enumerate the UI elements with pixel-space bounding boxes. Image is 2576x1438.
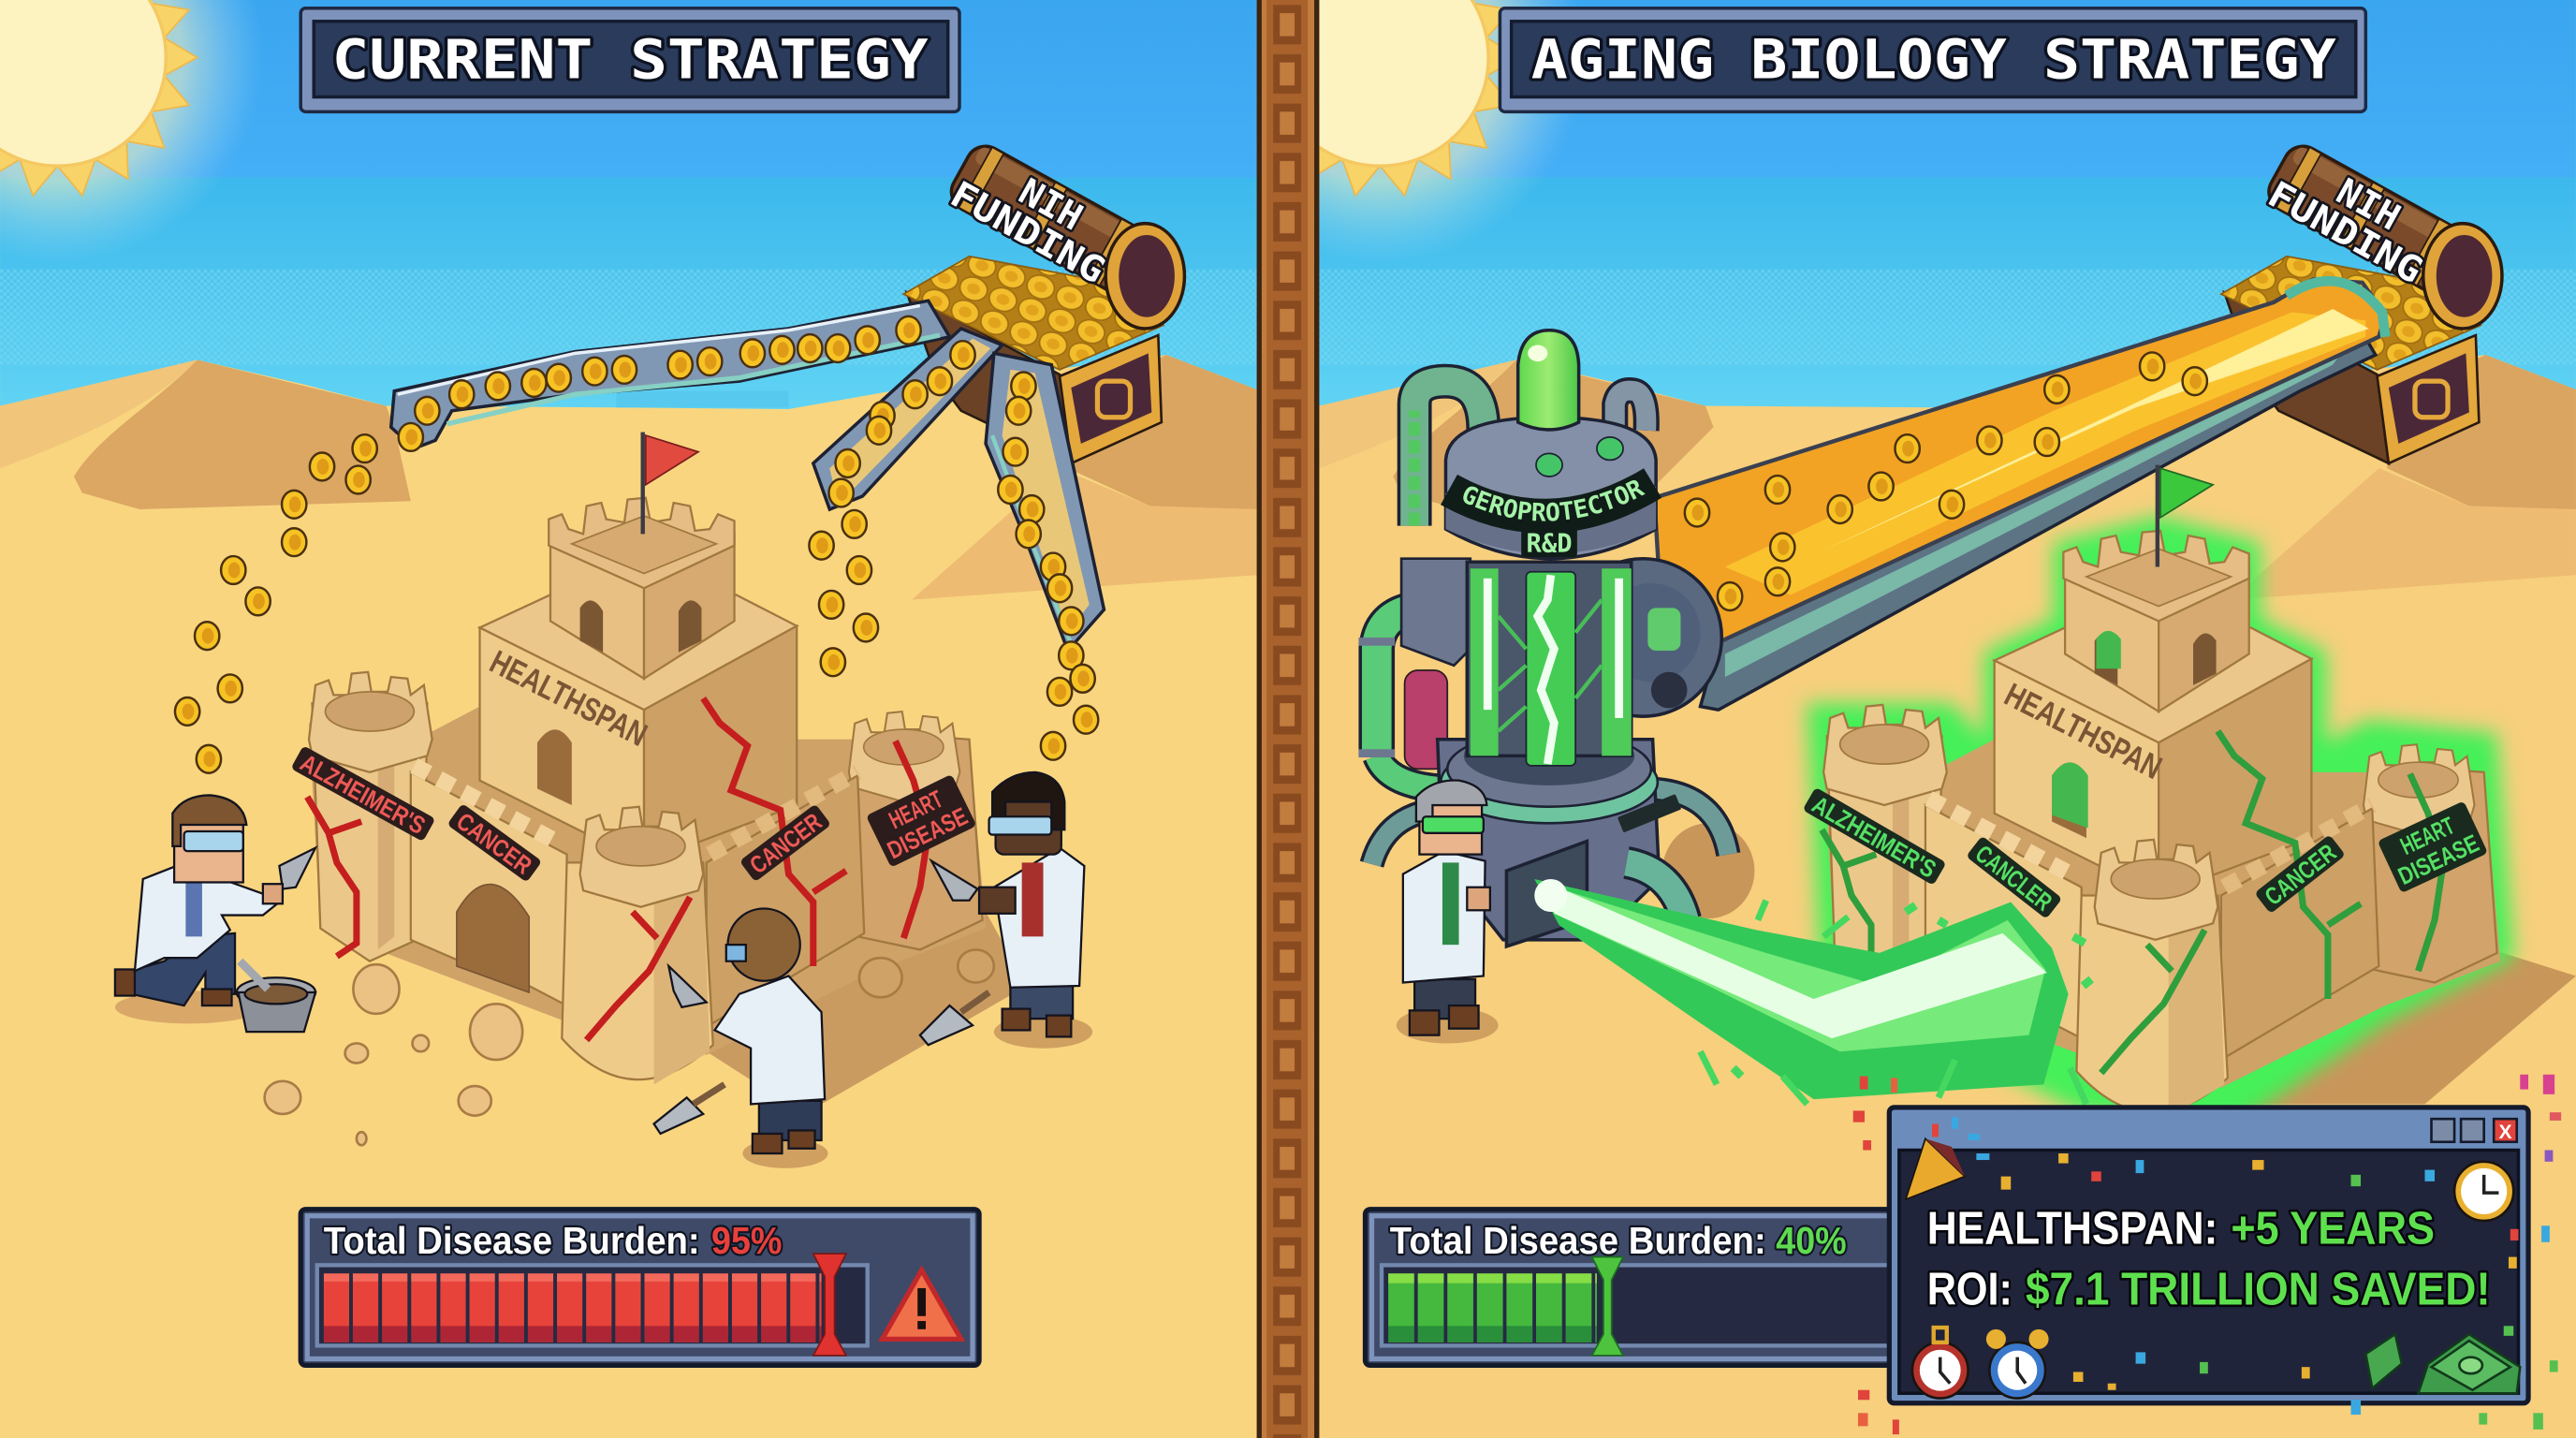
slide to left <box>391 301 949 451</box>
title banner: current strategy: CURRENT STRATEGY <box>332 27 929 91</box>
meter marker <box>813 1254 846 1356</box>
icon: alarm clock <box>1986 1329 2049 1399</box>
castle shadow <box>707 912 1027 1104</box>
castle glow <box>1810 520 2510 1125</box>
stat: plus five years: +5 YEARS <box>2231 1204 2435 1255</box>
scientist kneeling with mortar <box>115 795 315 1032</box>
label: cancler: CANCLER <box>1970 840 2057 917</box>
confetti <box>1853 1075 2561 1434</box>
base and legs <box>1372 726 1728 940</box>
green bulb <box>1518 330 1579 430</box>
disease burden meter: 95%: Total Disease Burden: <box>324 1219 700 1262</box>
side tank <box>1405 670 1447 769</box>
geroprotector R&D machine <box>1358 329 1754 942</box>
side housing <box>1401 559 1471 666</box>
label: heart disease: DISEASE <box>2393 829 2483 890</box>
sun <box>1319 0 1570 253</box>
label: healthspan: HEALTHSPAN <box>1998 676 2168 786</box>
treasure chest with NIH funding label <box>2221 139 2502 463</box>
icon: pocket watch <box>1912 1328 1969 1399</box>
fragmented funding slides <box>391 301 1104 651</box>
label: heart disease <box>2378 800 2488 893</box>
pipes <box>1358 381 1647 788</box>
disease burden meter: 40% <box>1365 1210 1908 1365</box>
glass reactor chamber <box>1467 562 1632 766</box>
window buttons: X <box>2498 1122 2511 1143</box>
window buttons <box>2431 1119 2517 1143</box>
slide down right <box>986 353 1104 651</box>
stat: roi: ROI: <box>1927 1264 2012 1314</box>
label: heart disease: DISEASE <box>883 801 972 864</box>
treasure chest with NIH funding label: FUNDING <box>2261 173 2429 292</box>
sand castle with cracks <box>290 433 986 1084</box>
disease burden meter: 95%: 95% <box>711 1219 782 1262</box>
sand rocks <box>265 949 994 1145</box>
title banner: aging biology strategy <box>1500 8 2365 111</box>
treasure chest with NIH funding label: NIH <box>2329 170 2407 240</box>
disease burden meter: 95% <box>300 1210 979 1365</box>
machine label: R&D <box>1526 530 1573 559</box>
dunes <box>1319 355 2576 1438</box>
spilled coins <box>175 434 1098 773</box>
scientist at control panel <box>1397 780 1499 1043</box>
icon: gold clock <box>2454 1162 2513 1221</box>
machine label <box>1441 468 1662 559</box>
results popup window <box>1853 1075 2561 1434</box>
scientist with dark skin and trowel <box>931 772 1092 1049</box>
scientist seen from behind <box>668 909 828 1168</box>
restored sand castle <box>1810 465 2510 1125</box>
icon: party popper <box>1906 1117 1989 1199</box>
dunes <box>0 355 1257 1438</box>
loose trowels <box>654 992 989 1134</box>
slide to right arc <box>813 329 1003 509</box>
unified funding funnel <box>1654 279 2385 710</box>
title banner: aging biology strategy: AGING BIOLOGY STRATEGY <box>1531 27 2336 91</box>
label: healthspan: HEALTHSPAN <box>484 643 652 754</box>
flag <box>2156 465 2213 566</box>
control console <box>1506 842 1587 946</box>
treasure chest with NIH funding label <box>903 139 1184 463</box>
background sky and sea <box>0 0 2576 424</box>
title banner: current strategy <box>300 8 959 111</box>
label: heart disease: HEART <box>885 785 947 834</box>
glowing hub <box>1564 559 1721 716</box>
red cracks <box>307 698 929 1040</box>
green healing cracks <box>1822 731 2443 1073</box>
icon: cash stacks <box>2365 1334 2520 1393</box>
disease burden meter: 40%: 40% <box>1776 1219 1847 1262</box>
machine head <box>1445 418 1656 559</box>
castle body <box>1823 531 2500 1117</box>
panel: current strategy <box>0 0 1257 1438</box>
stat: healthspan: HEALTHSPAN: <box>1927 1204 2217 1255</box>
green disease labels <box>1802 787 2488 920</box>
sun <box>0 0 263 263</box>
label: cancer 2: CANCER <box>744 807 827 879</box>
treasure chest with NIH funding label: FUNDING <box>944 173 1112 292</box>
green glowing openings <box>2052 631 2121 829</box>
warning triangle <box>883 1270 961 1339</box>
stat: savings: $7.1 TRILLION SAVED! <box>2026 1264 2491 1314</box>
panel: aging biology strategy <box>1256 0 2576 1438</box>
machine shadow <box>1662 823 1754 918</box>
label: cancler <box>1965 835 2062 920</box>
disease burden meter: 40%: Total Disease Burden: <box>1390 1219 1766 1262</box>
red meter fill <box>324 1273 822 1343</box>
flag <box>641 433 698 534</box>
label: heart disease: HEART <box>2396 811 2459 860</box>
green castle shadow <box>2217 948 2576 1104</box>
center divider <box>1257 0 1319 1438</box>
treasure chest with NIH funding label: NIH <box>1012 170 1090 240</box>
label: heart disease <box>866 774 976 868</box>
green meter fill <box>1388 1273 1597 1343</box>
label: cancer: CANCER <box>2260 838 2341 911</box>
green healing beam <box>1534 879 2091 1104</box>
label: alzheimer's: ALZHEIMER'S <box>296 748 430 840</box>
meter marker <box>1592 1257 1623 1356</box>
machine label: GEROPROTECTOR <box>1463 479 1646 521</box>
label: alzheimer's: ALZHEIMER'S <box>1808 790 1941 884</box>
label: cancer: CANCER <box>451 807 537 880</box>
